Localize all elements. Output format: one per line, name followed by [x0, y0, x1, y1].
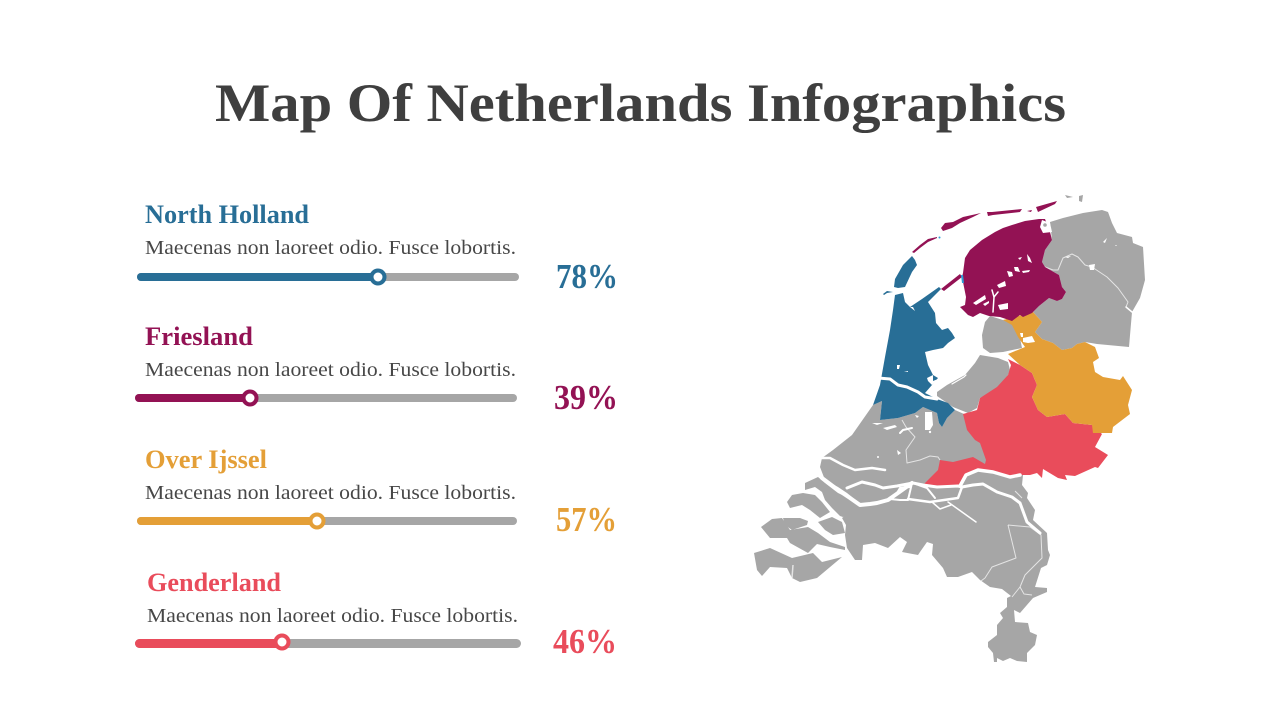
heading: Friesland: Friesland — [145, 322, 254, 351]
percentage: 39%: 39% — [554, 378, 618, 417]
progress bar: North Holland — [137, 270, 519, 284]
panel: Friesland — [135, 322, 618, 417]
percentage: 46%: 46% — [553, 622, 617, 661]
province lines — [902, 420, 940, 463]
description: Genderland: Maecenas non laoreet odio. Fusce lobortis. — [147, 605, 518, 627]
region: Friesland — [912, 201, 1066, 321]
panel: North Holland — [137, 200, 618, 296]
percentage: 78%: 78% — [556, 257, 618, 296]
percentage: 57%: 57% — [556, 500, 617, 539]
region: Gelderland — [923, 359, 1108, 486]
region: Groningen and Drenthe — [1033, 195, 1145, 350]
rivers — [792, 458, 1040, 578]
Wadden islands — [912, 201, 1057, 253]
region: North Holland — [873, 256, 955, 427]
map of the Netherlands — [754, 195, 1145, 662]
description: Over Ijssel: Maecenas non laoreet odio. Fusce lobortis. — [145, 482, 516, 504]
region: Flevoland north — [982, 316, 1022, 353]
heading: North Holland: North Holland — [145, 200, 310, 229]
region: Overijssel — [1003, 312, 1132, 433]
progress bar: Genderland — [135, 636, 521, 648]
region: Flevoland south — [937, 355, 1010, 413]
heading: Over Ijssel: Over Ijssel — [145, 445, 267, 474]
panel: Over Ijssel — [137, 445, 617, 539]
heading: Genderland: Genderland — [147, 568, 282, 597]
panel: Genderland — [135, 568, 617, 661]
progress bar: Friesland — [135, 392, 517, 404]
title: Map Of Netherlands Infographics — [215, 73, 1066, 133]
progress bar: Over Ijssel — [137, 514, 517, 528]
description: North Holland: Maecenas non laoreet odio. Fusce lobortis. — [145, 237, 516, 259]
description: Friesland: Maecenas non laoreet odio. Fusce lobortis. — [145, 359, 516, 381]
region: South Holland, Utrecht, North Brabant and Limburg — [820, 401, 1050, 662]
Afsluitdijk — [941, 274, 962, 291]
region: Zeeland and delta islands — [754, 477, 860, 582]
